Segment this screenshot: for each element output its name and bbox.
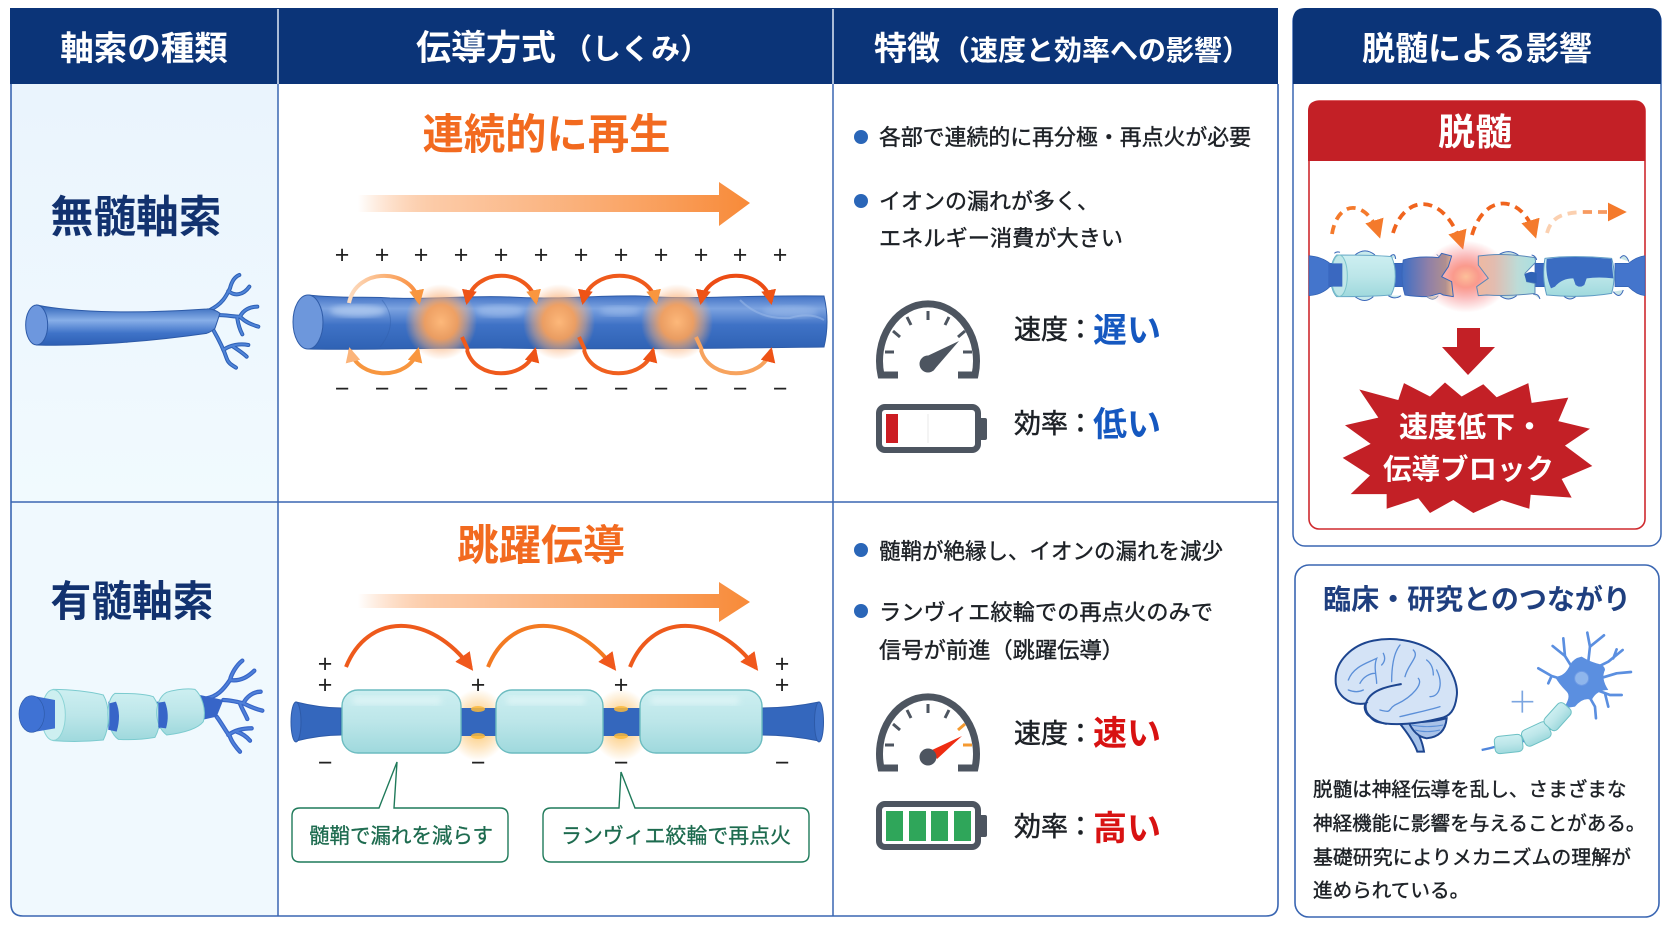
table backgrounds and frame — [11, 84, 1278, 916]
bullet list myelinated: 信号が前進（跳躍伝導） — [879, 638, 1124, 663]
description text: 脱髄は神経伝導を乱し、さまざまな — [1313, 778, 1626, 801]
node charges minus: − — [471, 749, 485, 777]
minus charges row: − — [614, 375, 628, 403]
minus charges row: − — [335, 375, 349, 403]
icon: slow speedometer — [880, 304, 977, 375]
icon: neuron — [1482, 633, 1631, 754]
minus charges row — [335, 375, 787, 403]
node charges plus: + — [318, 650, 332, 678]
demyelinated axon with lesion — [1309, 241, 1645, 313]
node charges minus: − — [318, 749, 332, 777]
heading: characteristics: （速度と効率への影響） — [942, 35, 1250, 66]
label: speed fast — [1014, 715, 1161, 753]
label: speed fast: ： — [1067, 719, 1094, 749]
bullet list unmyelinated — [854, 125, 1251, 251]
local current arcs above axon — [349, 276, 771, 303]
minus charges row: − — [694, 375, 708, 403]
bullet list unmyelinated: 各部で連続的に再分極・再点火が必要 — [879, 125, 1251, 150]
dashed impaired conduction arrows — [1332, 204, 1623, 246]
node charges plus: + — [775, 671, 789, 699]
minus charges row: − — [773, 375, 787, 403]
label: speed slow: 遅い — [1093, 312, 1161, 350]
description text: 基礎研究によりメカニズムの理解が — [1313, 847, 1631, 869]
icon: unmyelinated axon small — [26, 275, 258, 368]
plus charges row: + — [375, 241, 389, 269]
label: efficiency low: 低い — [1093, 406, 1161, 444]
plus charges row: + — [733, 241, 747, 269]
plus charges row — [335, 241, 787, 269]
arrow: conduction direction saltatory — [358, 582, 750, 622]
heading: conduction mechanism: （しくみ） — [563, 34, 709, 66]
minus charges row: − — [414, 375, 428, 403]
bullet list myelinated — [854, 539, 1223, 663]
minus charges row: − — [534, 375, 548, 403]
myelinated axon with nodes of Ranvier — [291, 689, 824, 761]
plus charges row: + — [414, 241, 428, 269]
starburst: speed drop and conduction block: 伝導ブロック — [1383, 453, 1554, 486]
plus charges row: + — [534, 241, 548, 269]
icon: fast speedometer — [880, 697, 977, 768]
bullet list myelinated: 髄鞘が絶縁し、イオンの漏れを減少 — [879, 539, 1223, 564]
table header band — [10, 8, 1278, 84]
row label: unmyelinated axon: 無髄軸索 — [50, 193, 222, 242]
label: efficiency low — [1014, 406, 1161, 444]
minus charges row: − — [375, 375, 389, 403]
heading: saltatory conduction: 跳躍伝導 — [457, 522, 625, 569]
callout: myelin reduces leakage — [292, 762, 508, 862]
panel: comparison table — [10, 8, 1278, 916]
panel header — [1293, 8, 1661, 84]
node charges minus: − — [614, 749, 628, 777]
label: efficiency high: ： — [1067, 812, 1094, 842]
arrow: conduction direction continuous — [358, 182, 750, 226]
icon: brain — [1336, 639, 1457, 752]
plus charges row: + — [694, 241, 708, 269]
icon: full battery — [879, 804, 987, 847]
sub-panel header: 脱髄 — [1438, 112, 1512, 153]
callout: re-ignition at nodes of Ranvier: ランヴィエ絞輪で再点火 — [561, 825, 791, 848]
plus charges row: + — [494, 241, 508, 269]
heading: characteristics: 特徴 — [874, 30, 940, 67]
plus charges row: + — [574, 241, 588, 269]
label: efficiency low: 効率 — [1014, 409, 1068, 439]
heading: continuous regeneration: 連続的に再生 — [422, 111, 670, 158]
description text: 進められている。 — [1313, 880, 1469, 902]
features: unmyelinated — [854, 125, 1251, 450]
starburst: speed drop and conduction block: 速度低下・ — [1399, 411, 1544, 444]
bullet list unmyelinated: イオンの漏れが多く、 — [879, 189, 1099, 214]
minus charges row: − — [454, 375, 468, 403]
minus charges row: − — [574, 375, 588, 403]
starburst: speed drop and conduction block — [1343, 382, 1592, 513]
label: speed slow: ： — [1067, 315, 1094, 345]
heading: conduction mechanism — [416, 29, 709, 68]
panel header: 脱髄による影響 — [1362, 30, 1592, 67]
description text — [1313, 778, 1646, 902]
unmyelinated axon tube with depolarization glows — [293, 284, 827, 360]
node charges plus: + — [318, 671, 332, 699]
label: speed slow — [1014, 312, 1161, 350]
node charges minus — [318, 749, 789, 777]
minus charges row: − — [494, 375, 508, 403]
description text: 神経機能に影響を与えることがある。 — [1313, 813, 1646, 835]
label: speed slow: 速度 — [1014, 315, 1068, 345]
node charges plus: + — [614, 671, 628, 699]
heading: conduction mechanism: 伝導方式 — [416, 29, 556, 68]
node charges plus: + — [775, 650, 789, 678]
plus charges row: + — [335, 241, 349, 269]
panel title: 臨床・研究とのつながり — [1323, 583, 1631, 615]
bullet list unmyelinated: エネルギー消費が大きい — [879, 226, 1123, 251]
panel: clinical and research connection — [1295, 565, 1659, 917]
node charges plus: + — [471, 671, 485, 699]
sub-panel: demyelination — [1308, 101, 1645, 529]
bullet list myelinated: ランヴィエ絞輪での再点火のみで — [879, 600, 1213, 625]
icon: low battery — [879, 407, 987, 450]
arrow: leads to — [1442, 328, 1495, 375]
row label: myelinated axon: 有髄軸索 — [50, 578, 214, 625]
plus charges row: + — [614, 241, 628, 269]
plus charges row: + — [454, 241, 468, 269]
icon: myelinated axon small — [19, 661, 262, 752]
node charges plus — [318, 650, 789, 699]
plus charges row: + — [773, 241, 787, 269]
label: speed fast: 速度 — [1014, 719, 1068, 749]
label: efficiency high: 効率 — [1014, 812, 1068, 842]
callout: myelin reduces leakage: 髄鞘で漏れを減らす — [309, 825, 493, 848]
callout: re-ignition at nodes of Ranvier — [543, 772, 809, 862]
plus charges row: + — [654, 241, 668, 269]
node charges minus: − — [775, 749, 789, 777]
label: efficiency high — [1014, 810, 1161, 848]
label: efficiency low: ： — [1067, 409, 1094, 439]
label: speed fast: 速い — [1093, 715, 1161, 753]
features: myelinated — [854, 539, 1223, 848]
local current arcs below axon — [350, 337, 771, 373]
label: efficiency high: 高い — [1093, 810, 1161, 848]
panel: effects of demyelination — [1293, 8, 1661, 546]
saltatory jump arcs — [346, 626, 756, 668]
sub-panel header — [1308, 101, 1645, 161]
heading: characteristics — [874, 30, 1250, 67]
heading: axon type: 軸索の種類 — [60, 31, 228, 68]
minus charges row: − — [733, 375, 747, 403]
minus charges row: − — [654, 375, 668, 403]
